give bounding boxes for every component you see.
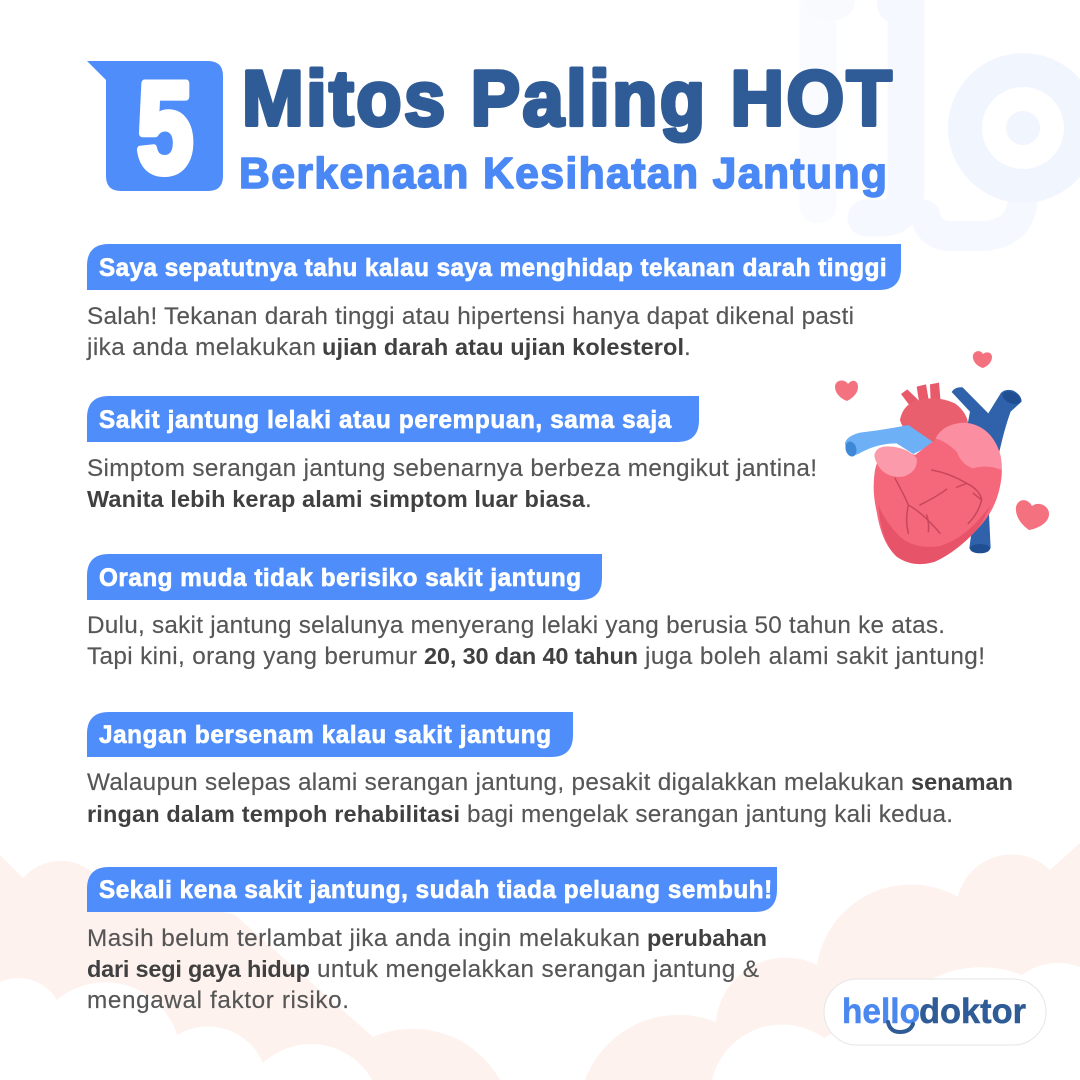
title icon: number 5 speech bubble — [87, 57, 223, 200]
myth 4 — [87, 712, 1013, 828]
myth 3 body text: Dulu, sakit jantung selalunya menyerang lelaki yang berusia 50 tahun ke atas. — [87, 612, 945, 639]
myth 5 heading bar: Sekali kena sakit jantung, sudah tiada peluang sembuh! — [99, 877, 772, 904]
myth 1 body text — [86, 303, 854, 361]
title: Mitos Paling HOT — [242, 55, 892, 142]
icon: heart right — [1016, 500, 1049, 530]
logo word doktor: doktor — [919, 992, 1026, 1031]
myth 2 body text — [87, 455, 817, 513]
myth 2 body text: . — [585, 486, 592, 513]
background stethoscope watermark — [818, 0, 1080, 236]
myth 4 heading bar: Jangan bersenam kalau sakit jantung — [99, 722, 551, 749]
vein: dark blue vessels — [952, 387, 1023, 553]
myth 1 heading bar: Saya sepatutnya tahu kalau saya menghidap tekanan darah tinggi — [99, 255, 887, 282]
title icon: number 5 speech bubble: 5 — [137, 57, 193, 200]
myth 3 body text — [87, 612, 985, 670]
myth 4 body text: senaman — [911, 769, 1013, 795]
myth 2 body text: Simptom serangan jantung sebenarnya berbeza mengikut jantina! — [87, 455, 817, 482]
myth 5 body text: untuk mengelakkan serangan jantung & — [317, 956, 759, 983]
heart highlights — [936, 423, 1002, 470]
myth 3 body text: Tapi kini, orang yang berumur — [87, 643, 417, 670]
arteries on top — [901, 383, 941, 406]
myth 3 — [87, 554, 985, 670]
icon: heart left — [835, 380, 858, 401]
myth 4 body text: bagi mengelak serangan jantung kali kedua. — [467, 801, 953, 828]
upper atrium — [900, 398, 968, 443]
myth 5 heading bar — [87, 867, 777, 912]
logo stethoscope arc — [888, 1022, 913, 1032]
myth 5 — [87, 867, 777, 1014]
myth 4 body text — [87, 769, 1013, 828]
illustration: heart — [844, 383, 1023, 564]
myth 2 heading bar — [87, 396, 699, 442]
myth 3 body text: 20, 30 dan 40 tahun — [424, 643, 638, 669]
myth 5 body text — [87, 925, 767, 1014]
myth 5 body text: Masih belum terlambat jika anda ingin melakukan — [87, 925, 640, 952]
myth 4 heading bar — [87, 712, 573, 757]
myth 1 body text: jika anda melakukan — [86, 334, 316, 361]
myth 5 body text: mengawal faktor risiko. — [87, 987, 349, 1014]
subtitle: Berkenaan Kesihatan Jantung — [239, 149, 887, 198]
myth 1 body text: ujian darah atau ujian kolesterol — [322, 334, 684, 360]
myth 2 — [87, 396, 817, 513]
myth 1 heading bar — [87, 244, 901, 290]
myth 4 body text: Walaupun selepas alami serangan jantung, pesakit digalakkan melakukan — [87, 769, 904, 796]
heart body — [874, 423, 1002, 564]
myth 3 heading bar: Orang muda tidak berisiko sakit jantung — [99, 565, 581, 592]
logo — [824, 979, 1046, 1045]
myth 5 body text: dari segi gaya hidup — [87, 956, 310, 982]
heart shadow — [878, 505, 991, 564]
myth 4 body text: ringan dalam tempoh rehabilitasi — [87, 801, 460, 827]
myth 1 — [86, 244, 901, 361]
myth 1 body text: Salah! Tekanan darah tinggi atau hipertensi hanya dapat dikenal pasti — [87, 303, 854, 330]
background clouds — [0, 843, 1080, 1080]
myth 3 body text: juga boleh alami sakit jantung! — [644, 643, 985, 670]
coronary vessels — [895, 470, 982, 533]
myth 5 body text: perubahan — [647, 925, 767, 951]
logo pill — [824, 979, 1046, 1045]
myth 1 body text: . — [684, 334, 691, 361]
logo word hello: hello — [842, 992, 920, 1031]
icon: heart top — [973, 351, 992, 368]
myth 2 heading bar: Sakit jantung lelaki atau perempuan, sama saja — [99, 407, 672, 434]
myth 2 body text: Wanita lebih kerap alami simptom luar biasa — [87, 486, 586, 512]
blue vessel — [844, 425, 935, 458]
myth 3 heading bar — [87, 554, 602, 600]
